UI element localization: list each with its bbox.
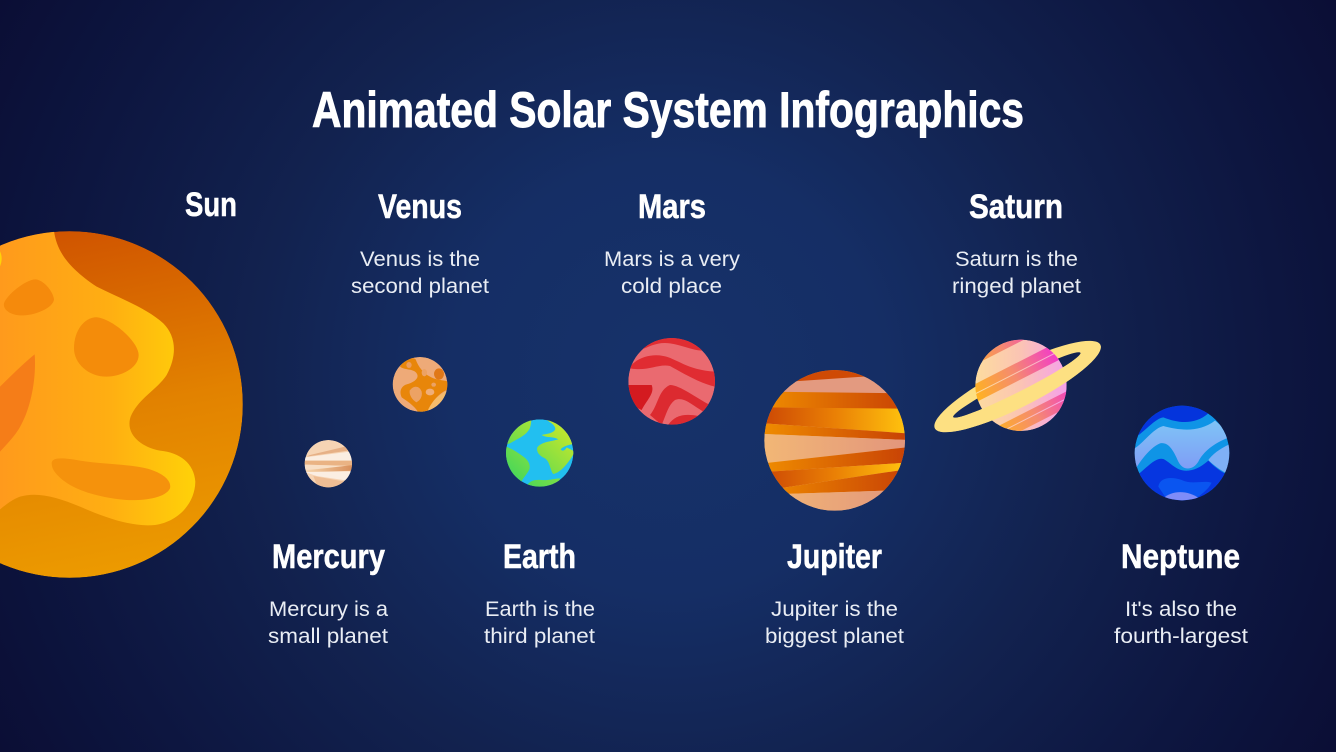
sun spot: centre [74,317,139,377]
heading: Earth: Earth [503,538,576,576]
description: Jupiter: Jupiter is the [771,597,898,621]
description: Neptune: fourth-largest [1114,624,1248,648]
sun spot: upper [4,279,54,315]
description: Mars: cold place [621,274,722,298]
bottom pale patch [1164,492,1198,500]
description: Mercury: Mercury is a [269,597,388,621]
globe [975,340,1067,431]
block: Jupiter [765,538,904,648]
planet: Venus [393,357,448,417]
heading: Venus: Venus [378,188,462,226]
description: Venus [351,247,489,298]
block: Mercury [268,538,388,648]
block: Venus [351,188,489,298]
ring: back [926,326,1110,447]
planet: Neptune [1134,406,1230,500]
heading: Saturn: Saturn [969,188,1063,226]
description: Mars: Mars is a very [604,247,740,271]
block: Mars [604,188,740,298]
planet: Jupiter [763,363,907,517]
sun spot: lower [52,458,170,500]
planet: Mercury [305,440,353,488]
land: top left [507,420,532,444]
lower lighter blue [1158,478,1212,498]
description: Saturn [952,247,1081,298]
description: Saturn: ringed planet [952,274,1081,298]
heading: Mercury: Mercury [272,538,385,576]
description: Saturn: Saturn is the [955,247,1078,271]
description: Jupiter: biggest planet [765,624,904,648]
land: right [537,418,575,474]
pale band [1133,421,1233,470]
sun spot: left crescent [0,354,35,458]
heading: Jupiter: Jupiter [787,538,882,576]
description: Neptune: It's also the [1125,597,1237,621]
planet: Sun [0,227,243,578]
description: Venus: second planet [351,274,489,298]
description: Neptune [1114,597,1248,648]
planet: Saturn [934,340,1101,432]
heading: Mars: Mars [638,188,706,226]
description: Earth [484,597,595,648]
block: Earth [484,538,595,648]
description: Jupiter [765,597,904,648]
ring: front [934,343,1101,432]
top cap [1138,406,1208,436]
planet: Earth [506,420,574,487]
description: Venus: Venus is the [360,247,480,271]
land: lower left [506,446,530,482]
lower deep blue [1139,458,1225,500]
right pale patch [1208,444,1230,472]
label: Sun: Sun [185,186,237,224]
planet: Mars [628,338,715,425]
heading: Neptune: Neptune [1121,538,1240,576]
description: Earth: third planet [484,624,595,648]
description: Mercury [268,597,388,648]
land: bottom [528,478,560,487]
description: Mercury: small planet [268,624,388,648]
description: Mars [604,247,740,298]
description: Earth: Earth is the [485,597,595,621]
block: Saturn [952,188,1081,298]
block: Neptune [1114,538,1248,648]
title: Animated Solar System Infographics [312,82,1024,138]
